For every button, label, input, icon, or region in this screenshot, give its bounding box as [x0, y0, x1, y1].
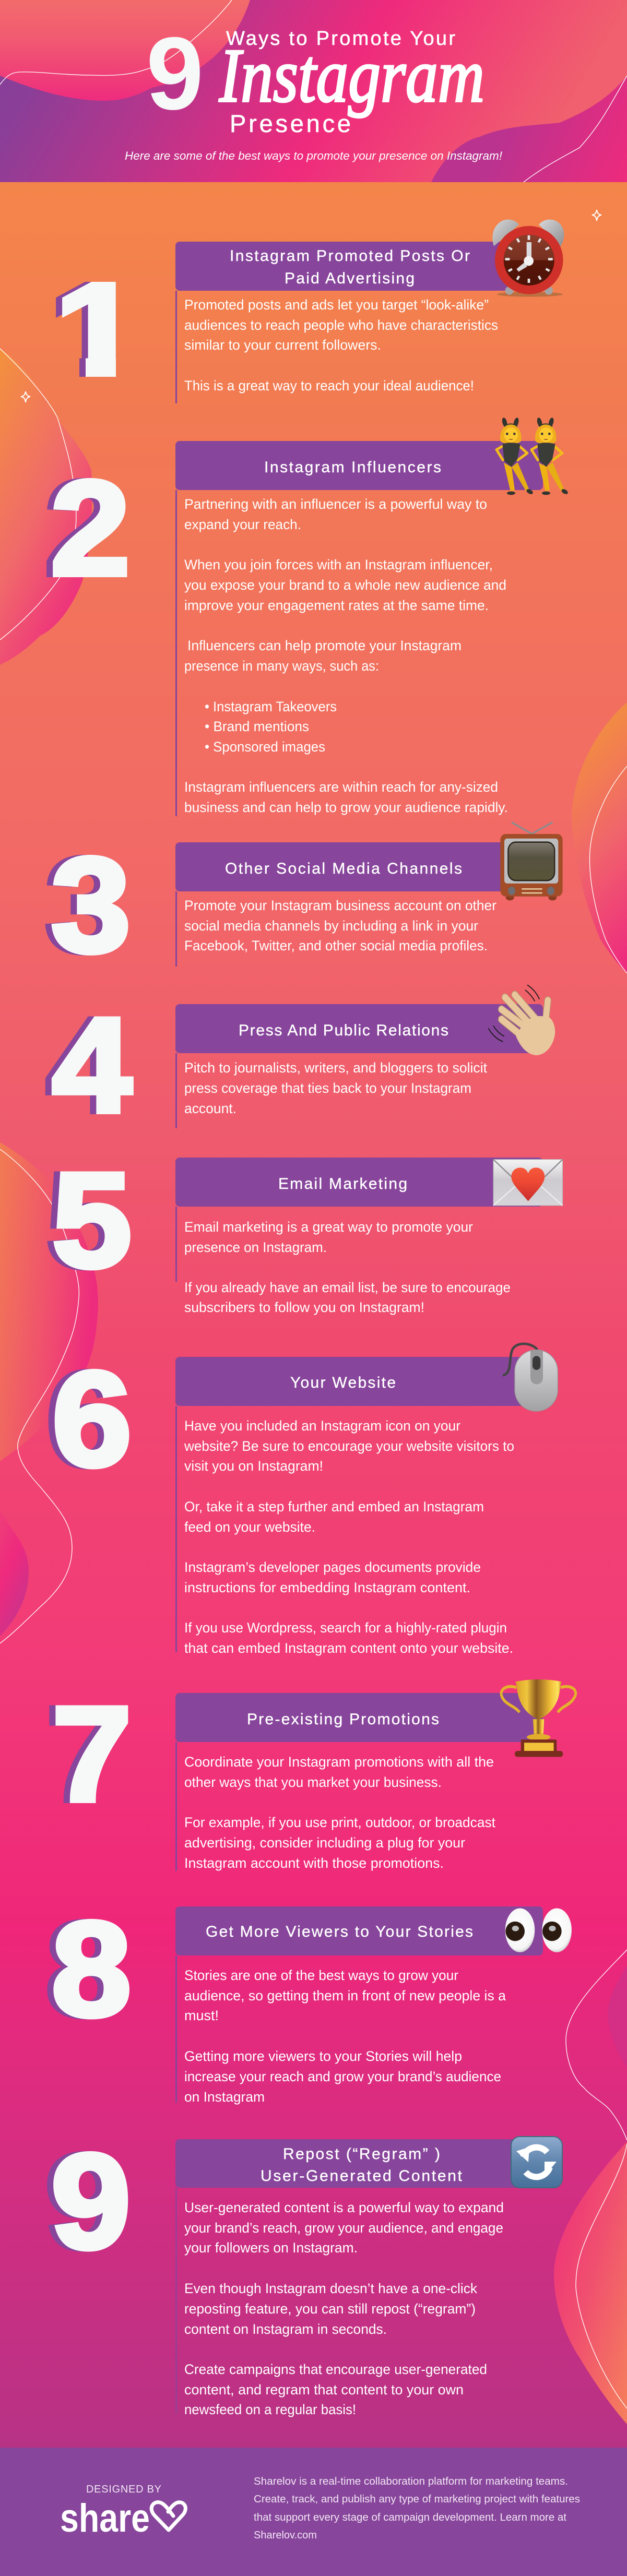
- header blob bottom right: [431, 76, 627, 182]
- body text: website? Be sure to encourage your website visitors to: [184, 1438, 514, 1454]
- body text: [184, 1060, 487, 1116]
- body text: social media channels by including a link in your: [184, 918, 478, 934]
- title numeral 9: 9: [146, 16, 204, 131]
- heading bar: Instagram Influencers: [264, 459, 441, 476]
- number 7: 7: [46, 1679, 125, 1829]
- heading bar: Email Marketing: [278, 1175, 407, 1192]
- section 3: [45, 822, 563, 980]
- section 1: [49, 220, 564, 403]
- icon: repeat button: [511, 2137, 562, 2188]
- body text: For example, if you use print, outdoor, or broadcast: [184, 1815, 495, 1830]
- footer description: Sharelov is a real-time collaboration platform for marketing teams.: [254, 2475, 568, 2487]
- body text: Have you included an Instagram icon on your: [184, 1418, 460, 1434]
- section 5: [46, 1145, 563, 1315]
- dancer left: [496, 417, 534, 495]
- body text: If you use Wordpress, search for a highly-rated plugin: [184, 1620, 507, 1636]
- body text: Partnering with an influencer is a powerful way to: [184, 496, 487, 512]
- sparkle left: [21, 391, 30, 402]
- body text: Instagram influencers are within reach for any-sized: [184, 779, 498, 795]
- heading bar: [175, 1357, 543, 1652]
- number 1: 1: [49, 256, 135, 402]
- sharelov logo: share: [60, 2496, 150, 2541]
- heading bar: [175, 441, 543, 816]
- body text: Promoted posts and ads let you target “look-alike”: [184, 297, 489, 313]
- body text: Email marketing is a great way to promote your: [184, 1219, 473, 1235]
- body text: Instagram account with those promotions.: [184, 1855, 444, 1871]
- body text: instructions for embedding Instagram content.: [184, 1580, 470, 1595]
- icon: eyes: [505, 1909, 572, 1952]
- body text: that can embed Instagram content onto your website.: [184, 1640, 513, 1656]
- heading bar: [175, 842, 543, 967]
- number 5: 5: [46, 1145, 125, 1295]
- subtitle: Here are some of the best ways to promote your presence on Instagram!: [125, 149, 502, 162]
- body text: presence in many ways, such as:: [184, 658, 379, 674]
- body text: Coordinate your Instagram promotions with all the: [184, 1754, 494, 1770]
- section 7: [46, 1679, 576, 1871]
- body text: business and can help to grow your audience rapidly.: [184, 800, 508, 815]
- body text: When you join forces with an Instagram influencer,: [184, 557, 493, 573]
- icon: love letter: [493, 1160, 563, 1206]
- footer description: Create, track, and publish any type of marketing project with features: [254, 2493, 580, 2505]
- section 8: [45, 1894, 572, 2105]
- heading bar: Pre-existing Promotions: [247, 1711, 439, 1728]
- body text: increase your reach and grow your brand’s audience: [184, 2069, 501, 2084]
- body text: [184, 2200, 504, 2417]
- icon: waving hand: [489, 985, 555, 1055]
- body text: Getting more viewers to your Stories will help: [184, 2048, 462, 2064]
- heading bar: User-Generated Content: [261, 2167, 463, 2185]
- body text: reposting feature, you can still repost (“regram”): [184, 2301, 476, 2317]
- heading bar: [175, 2139, 543, 2413]
- body text: Even though Instagram doesn’t have a one-click: [184, 2281, 477, 2296]
- heading bar: Press And Public Relations: [239, 1022, 448, 1039]
- body text: must!: [184, 2008, 219, 2023]
- body text: • Brand mentions: [205, 719, 309, 734]
- icon: television: [500, 822, 563, 900]
- body text: • Instagram Takeovers: [205, 699, 337, 714]
- body text: similar to your current followers.: [184, 337, 381, 353]
- number 5: 5: [52, 1145, 132, 1295]
- icon: bunny dancers: [496, 417, 569, 495]
- body text: User-generated content is a powerful way to expand: [184, 2200, 504, 2215]
- icon: trophy: [501, 1679, 576, 1757]
- number 2: 2: [51, 453, 130, 603]
- body text: If you already have an email list, be sure to encourage: [184, 1280, 511, 1295]
- body text: your brand’s reach, grow your audience, and engage: [184, 2220, 503, 2236]
- body text: audiences to reach people who have characteristics: [184, 317, 498, 333]
- body text: • Sponsored images: [205, 739, 325, 755]
- body text: newsfeed on a regular basis!: [184, 2402, 356, 2417]
- body text: Pitch to journalists, writers, and bloggers to solicit: [184, 1060, 487, 1076]
- body text: content on Instagram in seconds.: [184, 2321, 387, 2337]
- body text: [184, 297, 498, 393]
- sparkle top right: [592, 210, 601, 221]
- body text: Facebook, Twitter, and other social media profiles.: [184, 938, 488, 953]
- heading bar: [175, 1004, 543, 1128]
- body text: audience, so getting them in front of new people is a: [184, 1988, 506, 2003]
- number 1: 1: [55, 256, 141, 402]
- body text: on Instagram: [184, 2089, 265, 2105]
- heading bar: Repost (“Regram” ): [283, 2145, 440, 2163]
- number 1: [56, 282, 116, 377]
- body text: content, and regram that content to your own: [184, 2382, 464, 2398]
- body text: This is a great way to reach your ideal audience!: [184, 378, 474, 393]
- body text: Create campaigns that encourage user-generated: [184, 2362, 487, 2377]
- number 6: 6: [46, 1344, 125, 1494]
- number 2: 2: [44, 453, 124, 603]
- section 2: [44, 417, 569, 816]
- body text: press coverage that ties back to your Instagram: [184, 1080, 471, 1096]
- icon: computer mouse: [504, 1344, 558, 1411]
- number 9: 9: [51, 2126, 131, 2276]
- body text: [184, 496, 508, 815]
- body text: [184, 1967, 506, 2105]
- footer description: [254, 2475, 580, 2541]
- title line 3: Presence: [230, 110, 351, 137]
- title line 1: Ways to Promote Your: [226, 28, 455, 50]
- number 4: 4: [46, 990, 126, 1140]
- number 4: 4: [52, 990, 133, 1140]
- body text: your followers on Instagram.: [184, 2240, 358, 2256]
- heading bar: Paid Advertising: [285, 270, 415, 287]
- section 6: [46, 1344, 558, 1656]
- footer description: Sharelov.com: [254, 2529, 317, 2541]
- title script word: Instagram: [219, 33, 484, 118]
- body text: Promote your Instagram business account on other: [184, 898, 496, 913]
- heading bar: Your Website: [290, 1374, 396, 1391]
- body text: improve your engagement rates at the same time.: [184, 598, 489, 613]
- body text: [184, 1219, 511, 1315]
- body text: presence on Instagram.: [184, 1239, 327, 1255]
- body text: subscribers to follow you on Instagram!: [184, 1299, 424, 1315]
- body text: [184, 1418, 514, 1656]
- number 9: 9: [45, 2126, 124, 2276]
- body text: other ways that you market your business.: [184, 1774, 442, 1790]
- number 6: 6: [52, 1344, 132, 1494]
- body text: advertising, consider including a plug for your: [184, 1835, 465, 1851]
- header blob top left: [0, 0, 250, 101]
- number 3: 3: [45, 830, 124, 980]
- body text: [184, 898, 496, 953]
- body text: expand your reach.: [184, 517, 301, 532]
- heading bar: Other Social Media Channels: [225, 860, 462, 877]
- icon: alarm clock: [492, 220, 564, 297]
- body text: visit you on Instagram!: [184, 1458, 323, 1474]
- designed by label: DESIGNED BY: [86, 2484, 161, 2495]
- heading bar: Instagram Promoted Posts Or: [230, 247, 470, 265]
- header panel: [0, 0, 627, 182]
- number 8: 8: [52, 1894, 131, 2044]
- body text: Influencers can help promote your Instagram: [187, 638, 462, 653]
- section 9: [45, 2126, 562, 2417]
- section 4: [46, 985, 555, 1140]
- body text: [184, 1754, 495, 1871]
- body text: Stories are one of the best ways to grow your: [184, 1967, 458, 1983]
- body text: feed on your website.: [184, 1519, 315, 1535]
- dancer right: [531, 417, 569, 495]
- heading bar: [175, 1693, 543, 1871]
- number 7: 7: [52, 1679, 132, 1829]
- footer description: that support every stage of campaign development. Learn more at: [254, 2511, 566, 2523]
- body text: you expose your brand to a whole new audience and: [184, 577, 506, 593]
- footer panel: [0, 2448, 627, 2576]
- body text: account.: [184, 1101, 236, 1116]
- heading bar: Get More Viewers to Your Stories: [206, 1923, 473, 1940]
- body text: Or, take it a step further and embed an Instagram: [184, 1499, 484, 1514]
- heading bar: [175, 242, 543, 403]
- heading bar: [175, 1906, 543, 2103]
- body text: Instagram’s developer pages documents provide: [184, 1559, 481, 1575]
- number 8: 8: [45, 1894, 125, 2044]
- number 3: 3: [51, 830, 131, 980]
- heading bar: [175, 1158, 543, 1282]
